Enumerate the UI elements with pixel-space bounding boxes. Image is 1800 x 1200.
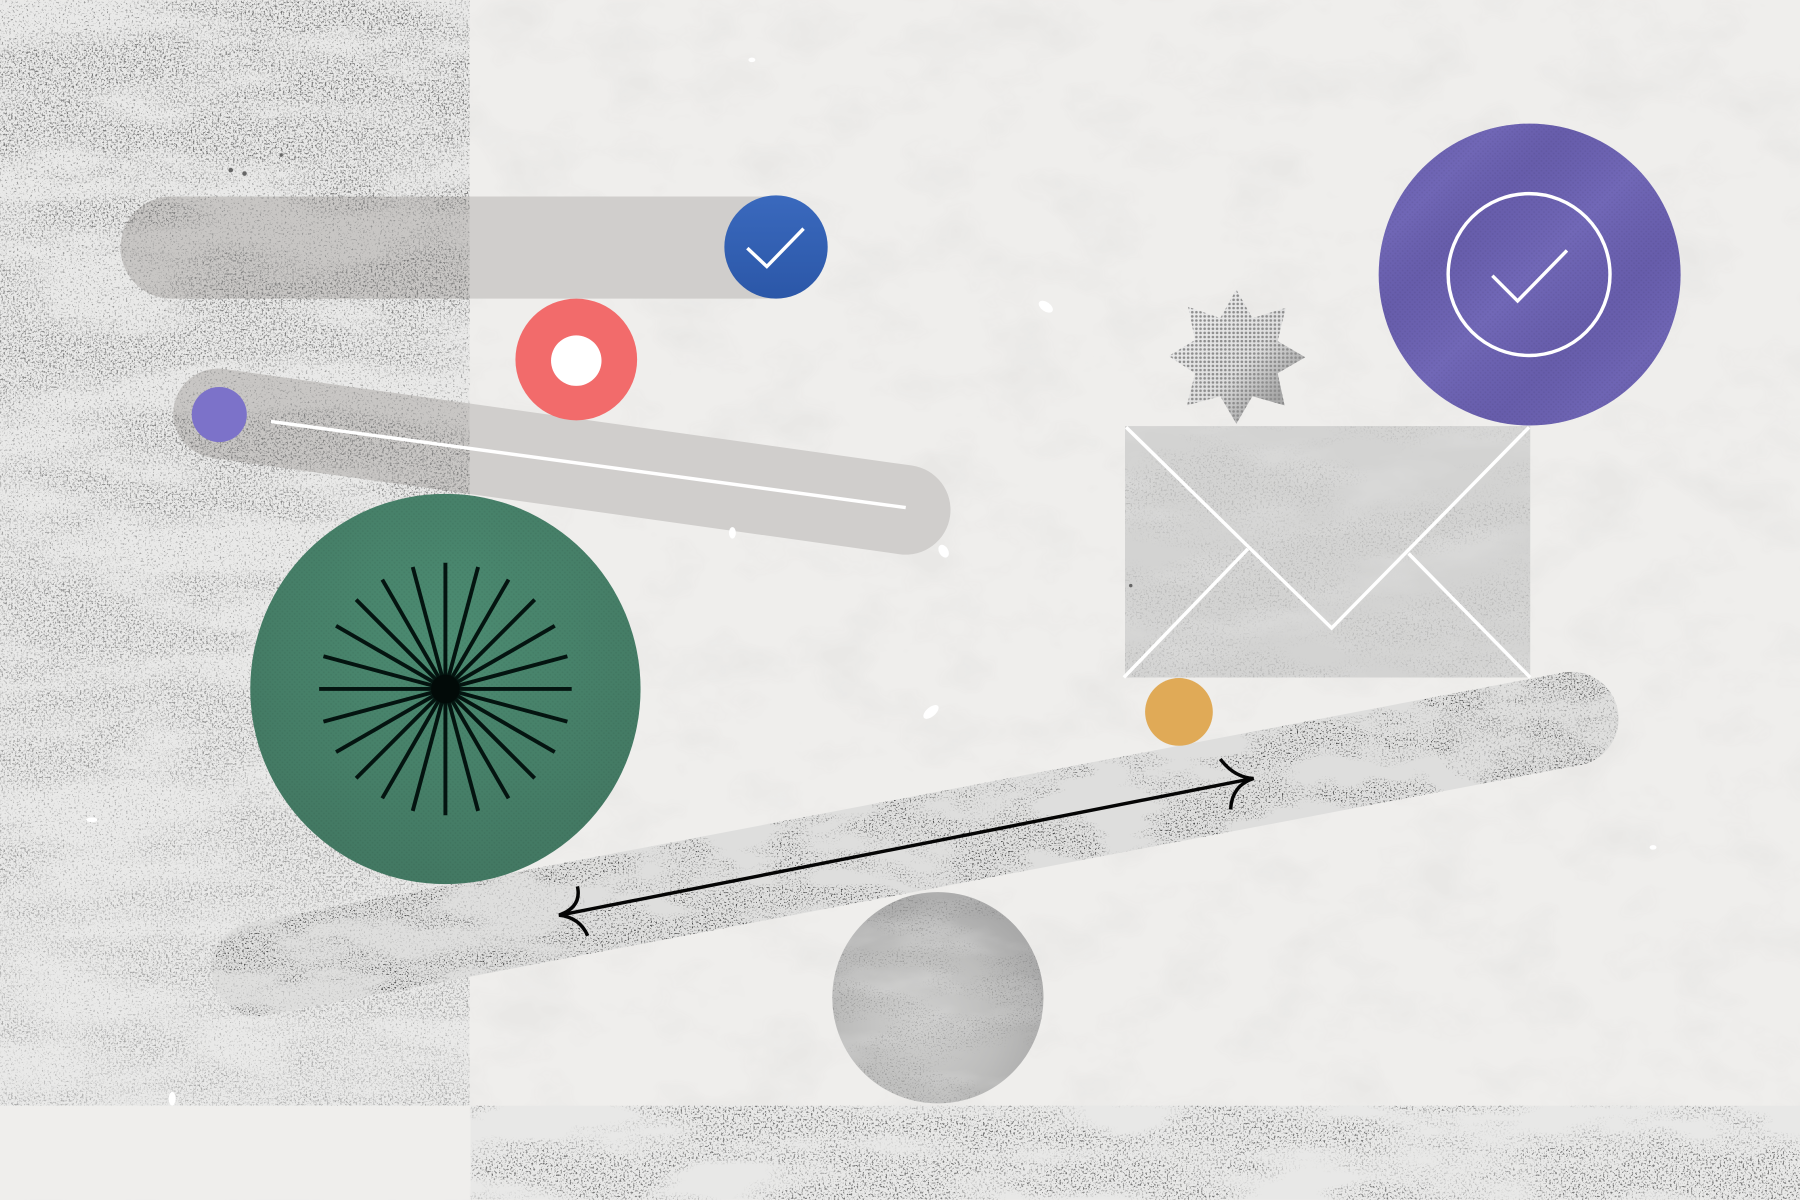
panel: left column speckle overlay	[0, 0, 470, 1106]
inner ring	[1448, 194, 1610, 355]
denser speckle at right end	[1481, 719, 1572, 736]
envelope flap lines	[1124, 427, 1530, 677]
starburst hub	[431, 675, 460, 703]
icon: small purple dot	[192, 387, 247, 442]
arrow: double-headed	[559, 759, 1254, 936]
top grey pill	[121, 196, 821, 299]
envelope	[1124, 426, 1530, 677]
seesaw plank	[258, 719, 1572, 969]
icon: red ring	[515, 299, 637, 420]
icon: orange dot	[1145, 678, 1213, 746]
paper flecks	[86, 58, 1657, 1106]
starburst rays	[319, 563, 572, 815]
panel: bottom textured strip	[471, 1106, 1800, 1200]
icon: halftone eight-point star	[1169, 289, 1305, 424]
panel: left textured column base	[0, 0, 470, 1106]
white line on grey pill	[271, 421, 906, 508]
denser speckle at left section	[258, 915, 540, 969]
icon: blue check circle	[724, 195, 828, 299]
icon: large purple check circle	[1379, 124, 1681, 426]
dark paper specks	[228, 153, 1132, 587]
tilted grey pill	[218, 413, 906, 510]
panel: bottom-left light strip	[0, 1106, 470, 1200]
icon: green starburst circle	[250, 494, 641, 884]
icon: grey fulcrum ball	[832, 892, 1043, 1103]
check mark	[1492, 250, 1567, 301]
